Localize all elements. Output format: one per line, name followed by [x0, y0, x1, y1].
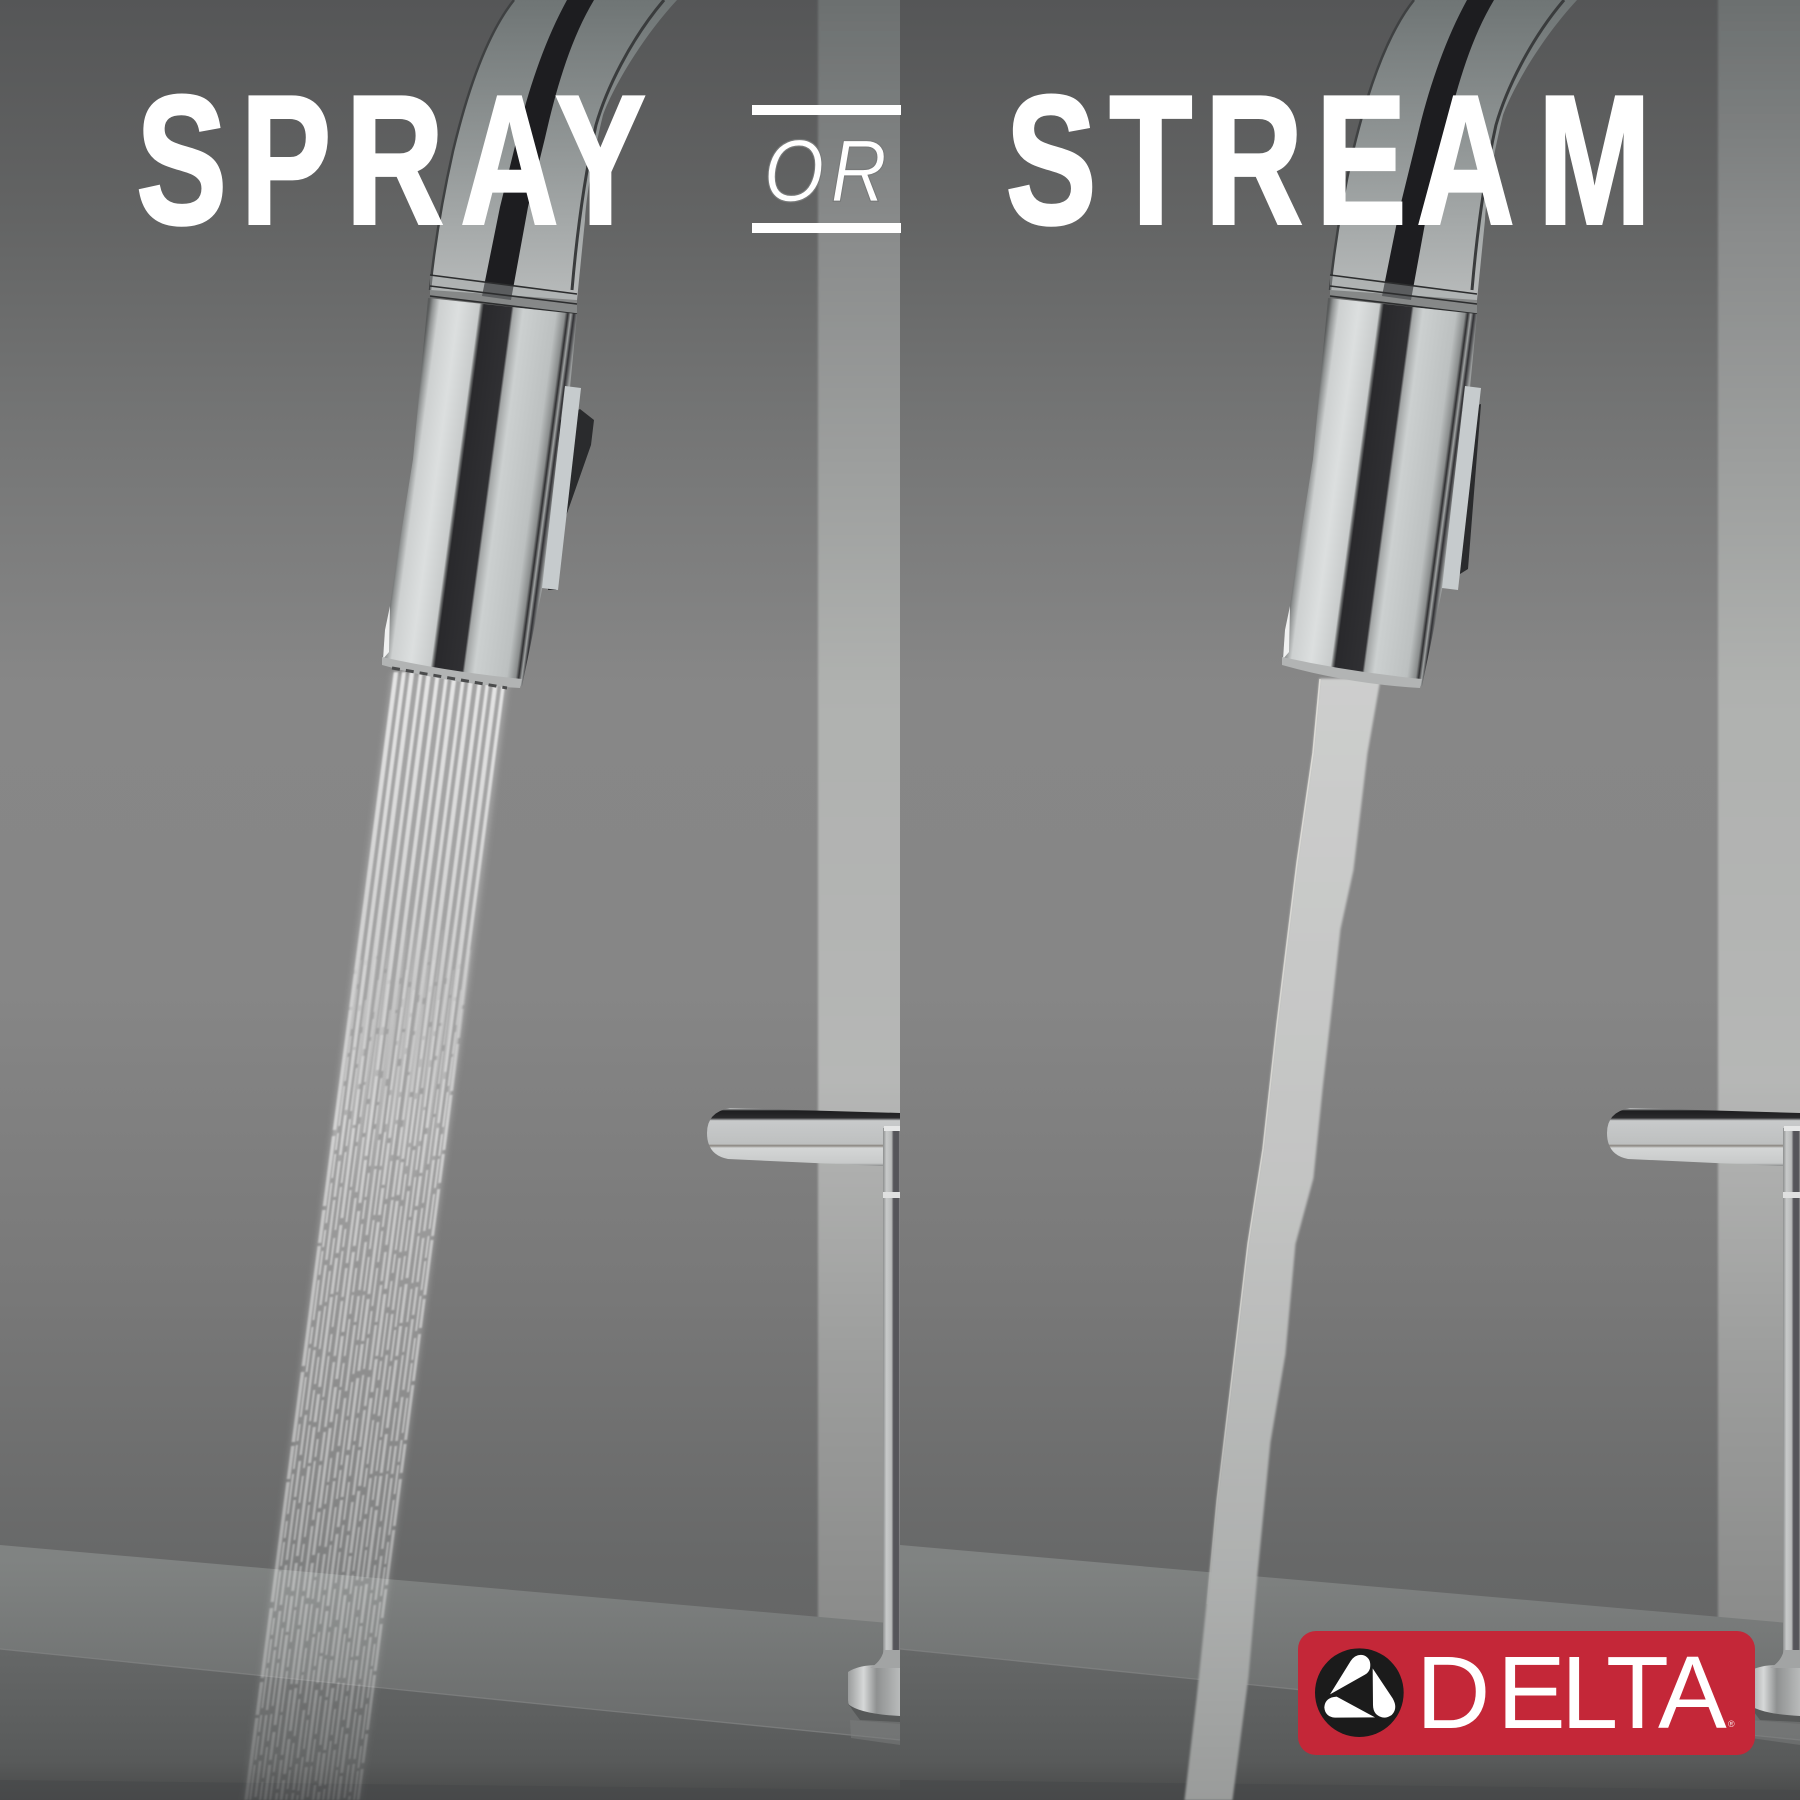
panel background: wall, accent strip and countertop [900, 0, 1800, 1800]
spray trigger button [542, 386, 594, 590]
heading: STREAM: STREAM [1006, 58, 1651, 263]
faucet spout and spray head [382, 0, 677, 688]
faucet spout and spray head [1282, 0, 1577, 688]
panel: spray (left) [0, 0, 908, 1800]
label: OR with rules: OR [764, 121, 887, 220]
second faucet handle [1607, 1108, 1800, 1745]
wordmark: DELTA: DELTA [1416, 1635, 1727, 1750]
stream trigger button [1442, 386, 1481, 590]
heading: SPRAY: SPRAY [136, 58, 646, 263]
panel background: wall, accent strip and countertop [0, 0, 908, 1800]
spray water [243, 672, 510, 1800]
icon: Delta triangle mark [1315, 1648, 1404, 1737]
stream water [1185, 679, 1380, 1800]
label: OR with rules [752, 105, 901, 233]
registered mark: ® [1728, 1719, 1735, 1729]
logo: Delta badge [1298, 1631, 1755, 1755]
second faucet handle [707, 1108, 900, 1745]
spray nozzles [392, 668, 507, 688]
panel: stream (right) [900, 0, 1800, 1800]
